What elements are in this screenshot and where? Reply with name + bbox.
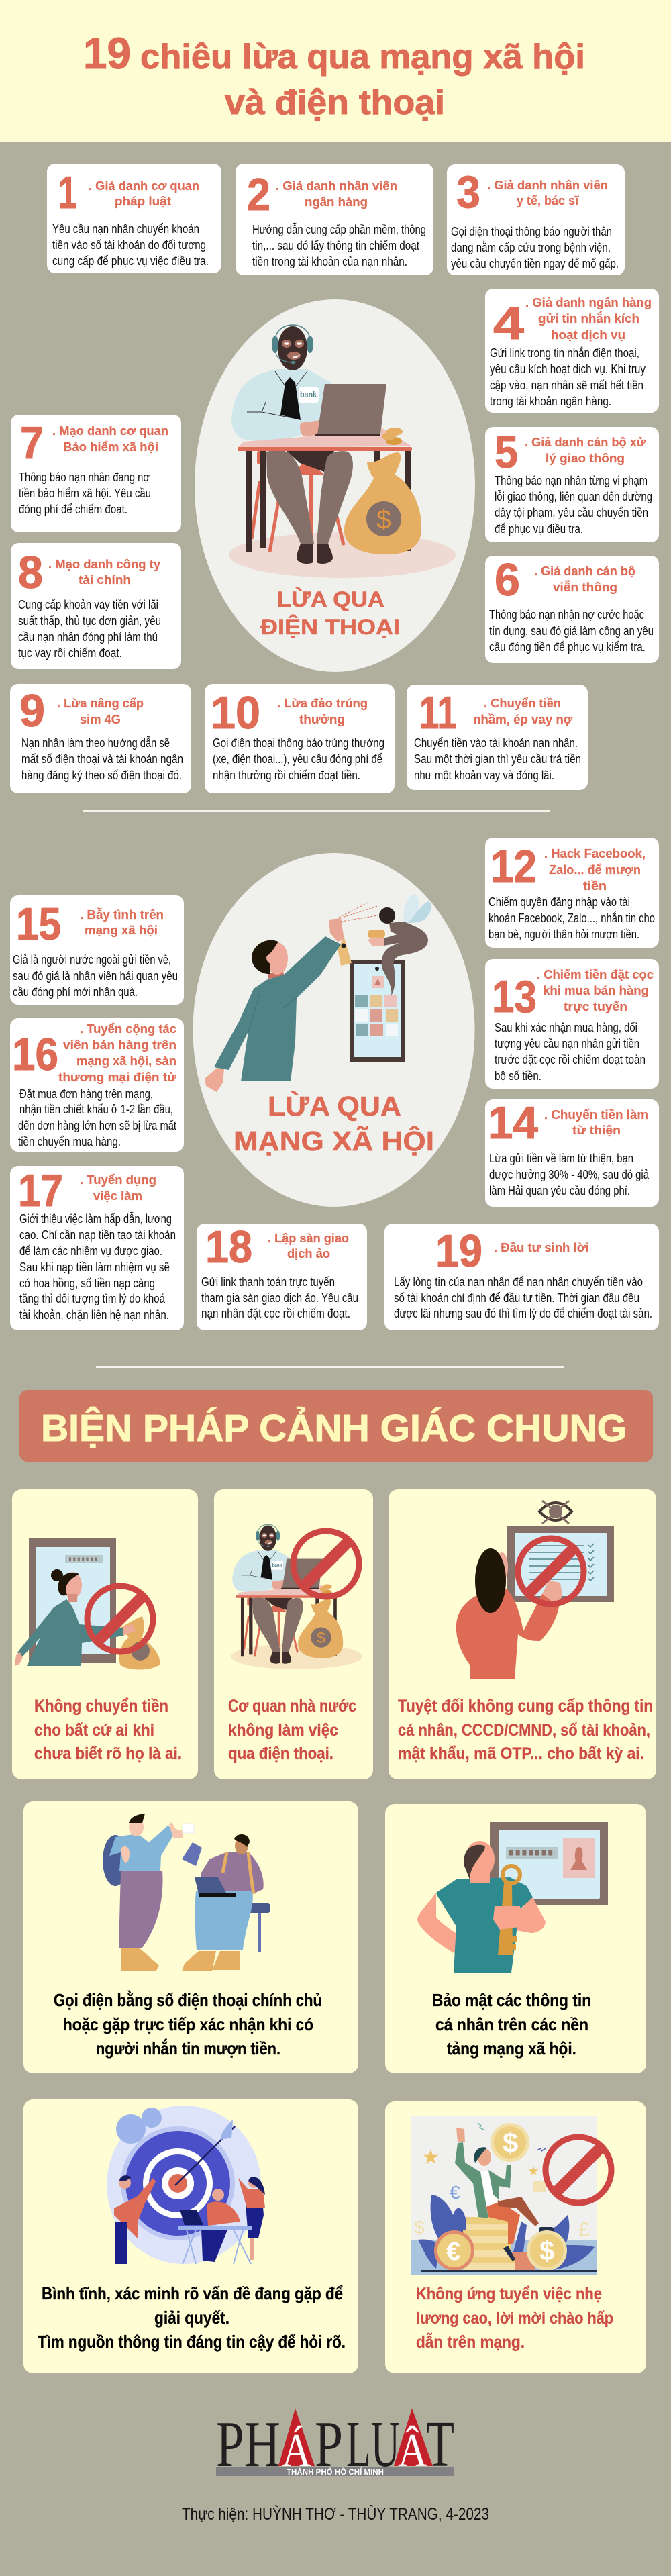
logo: Pháp Luật: Á	[282, 2425, 311, 2477]
text: do not share information: mật khẩu, mã OTP... cho bất kỳ ai.	[398, 1744, 644, 1763]
text: stay calm	[38, 2283, 346, 2352]
body 3: đang nằm cấp cứu trong bệnh viện,	[451, 240, 611, 254]
card 14	[485, 1097, 659, 1207]
heading 14	[544, 1107, 648, 1137]
number 11: 11	[419, 687, 457, 738]
heading 11	[473, 696, 573, 726]
card 4	[485, 289, 659, 413]
body 2: tiền trong tài khoản của nạn nhân.	[252, 255, 407, 268]
body 2: Hướng dẫn cung cấp phần mềm, thông	[252, 222, 426, 236]
number 6: 6	[495, 554, 520, 605]
label: phone scams	[260, 587, 400, 639]
heading 9	[57, 696, 144, 726]
illustration: masked scammer at desk: $	[376, 505, 391, 534]
icon: prohibition sign	[518, 1538, 584, 1604]
heading 3	[487, 178, 608, 207]
heading 10	[277, 696, 368, 726]
heading 7	[52, 424, 168, 454]
body 15: cầu đóng phí mới nhận quà.	[13, 985, 138, 999]
body 13	[495, 1021, 646, 1083]
body 6: cầu đóng tiền để phục vụ kiểm tra.	[489, 640, 646, 654]
illustration: target with arrow and team	[107, 2106, 265, 2264]
heading 13: trực tuyến	[564, 999, 627, 1013]
card 12	[485, 838, 659, 948]
credit line: Thực hiện: HUỲNH THƠ - THÙY TRANG, 4-2023	[182, 2504, 489, 2524]
number 9: 9	[19, 685, 45, 736]
label: social network scams	[234, 1091, 434, 1156]
body 16: Đặt mua đơn hàng trên mạng,	[19, 1087, 153, 1101]
heading 2: ngân hàng	[305, 195, 368, 209]
heading 13: khi mua bán hàng	[543, 983, 649, 997]
number 2: 2	[247, 169, 270, 220]
heading 12: tiền	[583, 879, 607, 893]
number 8: 8	[18, 547, 43, 598]
heading 9: . Lừa nâng cấp	[57, 696, 144, 710]
illustration: man sitting on coins: $	[414, 2217, 425, 2238]
heading 14: . Chuyển tiền làm	[544, 1107, 648, 1122]
text: call to verify: hoặc gặp trực tiếp xác nhận khi có	[63, 2014, 313, 2034]
illustration: scammer small	[232, 1524, 343, 1664]
body 12: Chiếm quyền đăng nhập vào tài	[488, 895, 630, 909]
heading 16: viên bán hàng trên	[63, 1038, 176, 1052]
heading 6: viễn thông	[553, 580, 617, 594]
logo: Pháp Luật: Ậ	[398, 2425, 427, 2477]
heading 11: . Chuyển tiền	[484, 696, 561, 710]
heading 4: hoạt dịch vụ	[551, 328, 625, 342]
number 13: 13	[492, 971, 537, 1022]
text: do not transfer money	[34, 1697, 182, 1763]
panel: social network scam oval	[193, 853, 475, 1207]
body 7: Thông báo nạn nhân đang nợ	[19, 470, 150, 484]
banner: general precautions	[19, 1390, 653, 1462]
text: stay calm: Bình tĩnh, xác minh rõ vấn đề đang gặp để	[42, 2283, 343, 2303]
body 15: Giả là người nước ngoài gửi tiền về,	[13, 953, 171, 967]
body 1: Yêu cầu nạn nhân chuyển khoản	[52, 222, 199, 236]
icon: prohibition sign	[87, 1586, 153, 1652]
title: chiêu lừa qua mạng xã hội	[140, 38, 585, 77]
illustration: two students talking	[103, 1814, 270, 1971]
heading 8	[48, 557, 161, 587]
banner: general precautions: BIỆN PHÁP CẢNH GIÁC CHUNG	[41, 1406, 627, 1450]
body 8: cầu nạn nhân đóng phí làm thủ	[18, 630, 158, 644]
heading 10: thưởng	[299, 712, 345, 726]
heading 3: . Giả danh nhân viên	[487, 178, 608, 192]
heading 9: sim 4G	[80, 712, 121, 726]
card 3	[447, 164, 625, 275]
heading 8: tài chính	[79, 573, 131, 587]
panel: call to verify	[23, 1801, 358, 2073]
logo: Pháp Luật: THÀNH PHỐ HỒ CHÍ MINH	[287, 2467, 384, 2477]
heading 10: . Lừa đảo trúng	[277, 696, 368, 710]
label: phone scams: LỪA QUA	[277, 587, 384, 611]
number 3: 3	[456, 166, 480, 217]
card 11	[407, 685, 588, 790]
body 9	[21, 736, 183, 782]
body 4: yêu cầu kích hoạt dịch vụ. Khi truy	[490, 362, 646, 376]
body 17	[19, 1211, 176, 1322]
text: state agencies: không làm việc	[228, 1721, 338, 1740]
text: secure information	[432, 1990, 591, 2059]
panel: do not share personal information	[389, 1489, 656, 1779]
body 8: suất thấp, thủ tục đơn giản, yêu	[18, 614, 161, 628]
body 3	[451, 225, 619, 270]
body 7	[19, 470, 151, 516]
card 16	[10, 1018, 184, 1152]
body 17: tài khoản, chặn liên hệ nạn nhân.	[19, 1308, 169, 1322]
body 2	[252, 222, 426, 268]
number 5: 5	[495, 427, 518, 478]
body 18: nạn nhân đặt cọc rồi chiếm đoạt.	[201, 1307, 350, 1320]
heading 13: . Chiếm tiền đặt cọc	[537, 967, 654, 981]
body 15: sau đó giả là nhân viên hải quan yêu	[13, 969, 178, 983]
body 18: Gửi link thanh toán trực tuyến	[201, 1275, 335, 1289]
text: secure information: Bảo mật các thông tin	[432, 1990, 591, 2010]
illustration: man sitting on coins: ★	[423, 2148, 439, 2167]
body 13: tượng yêu cầu nạn nhân gửi tiền	[495, 1037, 639, 1050]
heading 4: gửi tin nhắn kích	[538, 311, 639, 326]
card 6	[485, 554, 659, 663]
text: secure information: cá nhân trên các nền	[435, 2014, 588, 2034]
heading 2: . Giả danh nhân viên	[276, 179, 397, 193]
icon: prohibition sign	[546, 2137, 611, 2203]
illustration: woman handing money bag	[15, 1538, 160, 1670]
heading 19: . Đầu tư sinh lời	[494, 1240, 589, 1254]
header band	[0, 0, 671, 142]
body 9: mất số điện thoại và tài khoản ngân	[21, 752, 183, 766]
illustration: man sitting on coins: £	[578, 2219, 590, 2241]
panel: stay calm and verify	[23, 2099, 358, 2373]
body 16: đến đơn hàng lớn hơn sẽ bị lừa mất	[18, 1119, 176, 1132]
card 7	[11, 415, 181, 532]
illustration: fly thief	[368, 894, 431, 996]
text: do not transfer money: cho bất cứ ai khi	[34, 1721, 154, 1740]
floor shadow	[229, 532, 456, 578]
logo: Pháp Luật: LU	[346, 2408, 400, 2481]
body 15	[13, 953, 178, 999]
illustration: man sitting on coins	[411, 2116, 597, 2275]
heading 18: . Lập sàn giao	[268, 1231, 349, 1245]
panel: phone scam oval	[195, 299, 475, 672]
body 5	[495, 474, 652, 536]
heading 17	[80, 1173, 156, 1203]
logo: Pháp Luật	[216, 2408, 454, 2481]
body 4: cập vào, nạn nhân sẽ mất hết tiền	[490, 379, 643, 392]
heading 6	[534, 564, 635, 594]
body 11: như một khoản vay và đóng lãi.	[414, 769, 554, 782]
body 5: để phục vụ điều tra.	[495, 522, 583, 536]
logo: Pháp Luật: P	[315, 2408, 343, 2481]
body 11: Sau một thời gian thì yêu cầu trả tiền	[414, 752, 581, 766]
card 19	[384, 1224, 659, 1330]
card 5	[485, 427, 659, 542]
illustration: man holding key	[417, 1822, 608, 1973]
title	[83, 28, 585, 122]
heading 6: . Giả danh cán bộ	[534, 564, 635, 578]
text: do not share information	[398, 1697, 653, 1763]
title: 19	[83, 28, 131, 78]
text: call to verify	[54, 1990, 322, 2059]
text: stay calm: giải quyết.	[154, 2308, 229, 2328]
body 8: tục vay rồi chiếm đoạt.	[18, 646, 122, 660]
heading 16	[58, 1022, 177, 1084]
illustration: man with spray can	[205, 903, 378, 1092]
heading 2	[276, 179, 397, 209]
text: state agencies: Cơ quan nhà nước	[228, 1697, 356, 1716]
heading 13	[537, 967, 654, 1013]
heading 17: việc làm	[93, 1189, 142, 1203]
body 8: Cung cấp khoản vay tiền với lãi	[18, 598, 158, 611]
body 11	[414, 736, 581, 782]
number 16: 16	[12, 1029, 58, 1080]
body 14: Lừa gửi tiền về làm từ thiện, bạn	[489, 1152, 633, 1165]
number 17: 17	[18, 1165, 63, 1216]
body 10	[213, 736, 384, 782]
body 14	[489, 1152, 650, 1197]
illustration: phone with app icons	[350, 960, 405, 1062]
heading 12	[544, 846, 646, 893]
heading 3: y tế, bác sĩ	[517, 193, 580, 207]
card 17	[10, 1165, 184, 1330]
text: secure information: tảng mạng xã hội.	[447, 2038, 576, 2059]
text: do not transfer money: Không chuyển tiền	[34, 1697, 168, 1716]
heading 11: nhầm, ép vay nợ	[473, 712, 573, 726]
label: social network scams: MẠNG XÃ HỘI	[234, 1126, 434, 1156]
heading 14: từ thiện	[572, 1123, 621, 1137]
text: state agencies	[228, 1697, 356, 1763]
body 10: (xe, điện thoại...), yêu cầu đóng phí để	[213, 752, 382, 766]
title: và điện thoại	[225, 83, 445, 122]
heading 15: . Bẫy tình trên	[80, 907, 164, 922]
label: phone scams: ĐIỆN THOẠI	[260, 615, 400, 639]
text: do not apply: Không ứng tuyển việc nhẹ	[416, 2285, 602, 2303]
heading 5	[525, 435, 646, 465]
body 13: trước đặt cọc rồi chiếm đoạt toàn	[495, 1053, 646, 1067]
card 10	[205, 684, 395, 793]
card 1	[47, 164, 221, 273]
panel: secure personal information	[385, 1804, 646, 2073]
text: do not apply: dẫn trên mạng.	[416, 2332, 525, 2352]
body 7: tiền bảo hiểm xã hội. Yêu cầu	[19, 487, 151, 500]
illustration: masked scammer at desk: bank	[300, 389, 317, 399]
number 4: 4	[493, 298, 524, 349]
body 13: bộ số tiền.	[495, 1069, 541, 1083]
heading 15: mạng xã hội	[85, 923, 158, 937]
body 1: cung cấp để phục vụ việc điều tra.	[52, 254, 209, 268]
panel: state agencies do not work by phone	[214, 1489, 373, 1779]
heading 17: . Tuyển dụng	[80, 1173, 156, 1187]
heading 5: . Giả danh cán bộ xử	[525, 435, 646, 449]
body 16: nhận tiền chiết khấu ở 1-2 lần đầu,	[19, 1103, 173, 1116]
heading 1: pháp luật	[115, 194, 171, 208]
text: call to verify: Gọi điện bằng số điện thoại chính chủ	[54, 1990, 322, 2010]
body 2: tin,... sau đó lấy thông tin chiếm đoạt	[252, 239, 419, 252]
body 3: Gọi điện thoại thông báo người thân	[451, 225, 612, 238]
heading 8: . Mạo danh công ty	[48, 557, 161, 571]
text: stay calm: Tìm nguồn thông tin đáng tin cậy để hỏi rõ.	[38, 2332, 346, 2352]
body 13: Sau khi xác nhận mua hàng, đối	[495, 1021, 637, 1034]
body 4: trong tài khoản ngân hàng.	[490, 395, 611, 408]
heading 7: Bảo hiểm xã hội	[63, 440, 158, 454]
body 9: hàng đăng ký theo số điện thoại đó.	[21, 769, 182, 782]
body 12: bạn bè, người thân hỏi mượn tiền.	[488, 928, 639, 941]
body 1: tiền vào số tài khoản do đối tượng	[52, 238, 206, 252]
card 2	[236, 164, 433, 275]
body 9: Nạn nhân làm theo hướng dẫn sẽ	[21, 736, 170, 750]
heading 4: . Giả danh ngân hàng	[525, 295, 652, 309]
body 19	[394, 1275, 652, 1320]
panel: do not apply for easy jobs	[385, 2101, 646, 2373]
body 17: Giới thiệu việc làm hấp dẫn, lương	[19, 1211, 172, 1226]
illustration: man sitting on coins: $	[503, 2127, 518, 2159]
body 16: tiền chuyển mua hàng.	[18, 1135, 121, 1148]
body 10: Gọi điện thoại thông báo trúng thưởng	[213, 736, 384, 750]
heading 16: . Tuyển cộng tác	[80, 1022, 176, 1036]
card 9	[10, 684, 191, 793]
number 14: 14	[488, 1097, 538, 1148]
body 16	[18, 1087, 176, 1148]
body 4	[490, 346, 646, 408]
heading 15	[80, 907, 164, 937]
text: state agencies: qua điện thoại.	[228, 1744, 333, 1763]
number 15: 15	[16, 899, 61, 950]
body 11: Chuyển tiền vào tài khoản nạn nhân.	[414, 736, 578, 750]
icon: crossed eye	[539, 1501, 572, 1524]
number 10: 10	[211, 687, 260, 738]
card 15	[10, 895, 184, 1005]
heading 16: thương mại điện tử	[58, 1070, 177, 1084]
illustration: woman at screen	[456, 1526, 614, 1679]
heading 12: Zalo... để mượn	[549, 862, 641, 877]
text: do not apply: lương cao, lời mời chào hấp	[416, 2309, 613, 2328]
card 8	[11, 543, 181, 669]
logo: Pháp Luật: PH	[216, 2408, 280, 2481]
body 4: Gửi link trong tin nhắn điện thoại,	[490, 346, 639, 360]
body 17: tăng thì đối tượng tìm lý do khoá	[19, 1292, 166, 1305]
card 18	[197, 1222, 367, 1330]
illustration: man sitting on coins: ★	[528, 2166, 539, 2177]
heading 1: . Giả danh cơ quan	[89, 179, 199, 193]
body 18: tham gia sàn giao dịch ảo. Yêu cầu	[201, 1291, 358, 1305]
heading 7: . Mạo danh cơ quan	[52, 424, 168, 438]
heading 18	[268, 1231, 349, 1260]
body 8	[18, 598, 161, 660]
body 17: có hoa hồng, số tiền nạp càng	[19, 1277, 155, 1290]
number 1: 1	[58, 167, 77, 218]
card 13	[485, 959, 659, 1089]
illustration: man sitting on coins: $	[539, 2236, 554, 2266]
body 17: cao. Chỉ cần nạp tiền tạo tài khoản	[19, 1228, 176, 1242]
heading 4	[525, 295, 652, 342]
heading 12: . Hack Facebook,	[544, 846, 646, 860]
logo: Pháp Luật: T	[426, 2408, 454, 2481]
icon: prohibition sign	[293, 1531, 359, 1597]
body 6	[489, 608, 654, 654]
heading 1	[89, 179, 199, 208]
heading 18: dịch ảo	[287, 1246, 330, 1260]
body 17: để làm các nhiệm vụ được giao.	[19, 1244, 162, 1258]
label: social network scams: LỪA QUA	[268, 1091, 401, 1122]
illustration: masked scammer at desk	[231, 325, 421, 564]
body 1	[52, 222, 209, 268]
illustration: man sitting on coins: €	[446, 2238, 460, 2266]
body 7: đóng phí để chiếm đoạt.	[19, 503, 127, 516]
body 14: làm Hải quan yêu cầu đóng phí.	[489, 1184, 630, 1197]
body 17: Sau khi nạp tiền làm nhiệm vụ sẽ	[19, 1260, 170, 1274]
number 12: 12	[491, 841, 537, 892]
text: call to verify: người nhắn tin mượn tiền.	[96, 2038, 280, 2059]
body 18	[201, 1275, 358, 1320]
panel: do not transfer money	[12, 1489, 198, 1779]
heading 16: mạng xã hội, sàn	[76, 1054, 176, 1068]
body 12	[488, 895, 655, 941]
floor shadow	[231, 1644, 362, 1669]
body 10: nhận thưởng rồi chiếm đoạt tiền.	[213, 769, 360, 782]
body 3: yêu cầu chuyển tiền ngay để mổ gấp.	[451, 257, 619, 270]
number 7: 7	[20, 417, 44, 468]
text: do not apply	[416, 2285, 613, 2352]
illustration: man sitting on coins: €	[450, 2182, 460, 2203]
number 18: 18	[205, 1222, 252, 1273]
text: do not transfer money: chưa biết rõ họ là ai.	[34, 1744, 182, 1763]
number 19: 19	[435, 1226, 482, 1277]
heading 5: lý giao thông	[546, 451, 625, 465]
